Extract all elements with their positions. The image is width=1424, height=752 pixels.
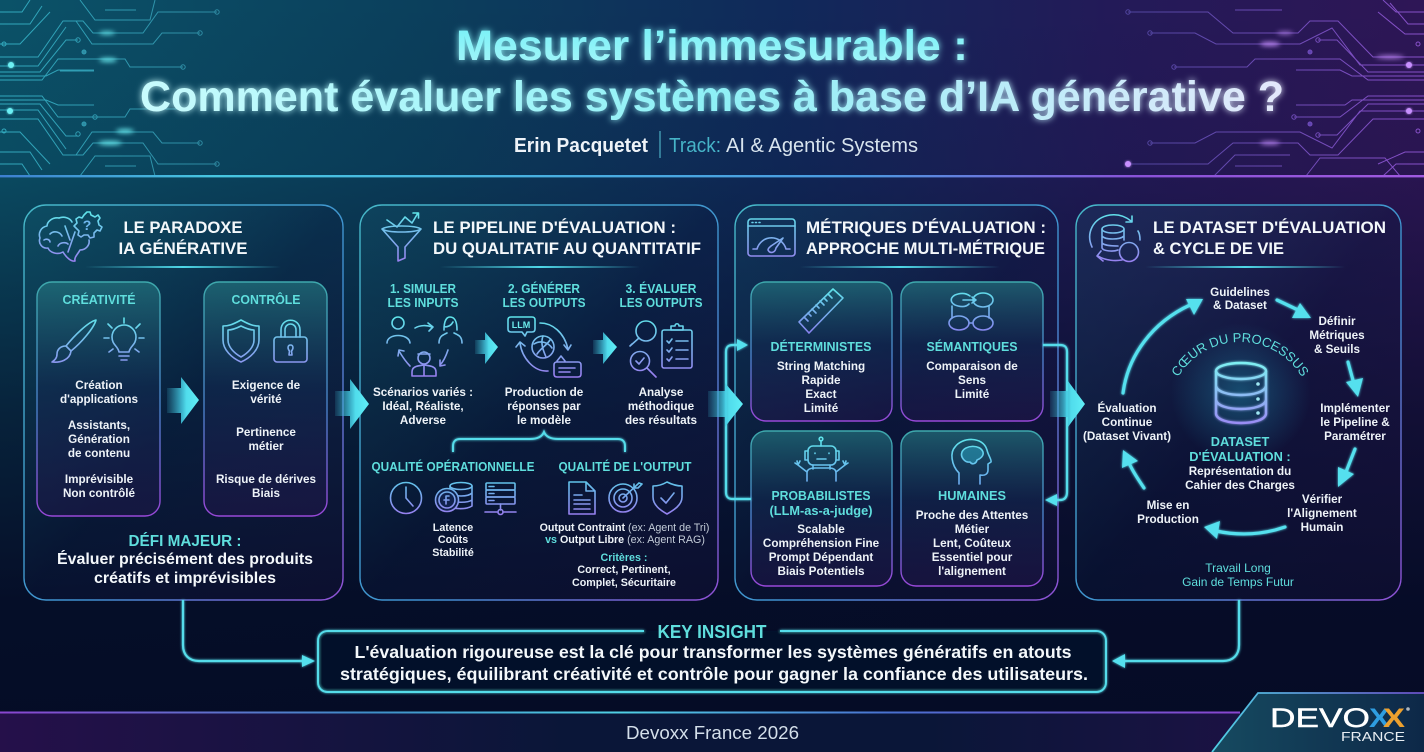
core title: DATASET	[1211, 434, 1269, 449]
card text: Pertinence	[236, 426, 296, 439]
core: cœur du processus	[1172, 333, 1308, 492]
icon: paint brush	[52, 320, 96, 362]
step: évaluation continue: Évaluation	[1097, 402, 1157, 415]
step: définir: Définir	[1318, 315, 1356, 328]
callout: défi majeur	[57, 531, 313, 587]
core title: D'ÉVALUATION :	[1189, 449, 1291, 464]
text: Stabilité	[432, 547, 474, 559]
text: Coûts	[438, 534, 468, 546]
icon: three personas	[387, 317, 462, 376]
icon: dataset cycle	[1090, 215, 1140, 262]
criteria: Correct, Pertinent,	[577, 564, 671, 576]
fat arrow: panel 3 to panel 4	[1050, 381, 1085, 427]
logo xx: X	[1369, 703, 1390, 733]
step 1: simuler les inputs: 1. SIMULER	[390, 282, 456, 296]
criteria: Critères :	[601, 552, 647, 564]
step text: Adverse	[400, 414, 447, 427]
heading: & CYCLE DE VIE	[1153, 239, 1284, 258]
arrow: créativité to contrôle	[167, 377, 199, 424]
card text: Création	[75, 379, 123, 392]
title: Mesurer l’immesurable :	[456, 22, 968, 70]
step text: Production de	[505, 386, 584, 399]
card text: vérité	[250, 393, 282, 406]
icon: padlock	[274, 320, 307, 362]
step text	[505, 386, 584, 427]
icon: head with brain	[952, 439, 991, 484]
connector: probabilistes to déterministes	[726, 339, 751, 499]
step: vérifier: l'Alignement	[1287, 507, 1357, 520]
icon: database	[1216, 363, 1266, 423]
logo wordmark: DEVO	[1270, 703, 1370, 733]
title	[770, 488, 872, 518]
icon: server	[485, 483, 516, 514]
heading: MÉTRIQUES D'ÉVALUATION :	[806, 218, 1046, 237]
note: travail long: Travail Long	[1205, 561, 1271, 575]
step: implémenter	[1320, 402, 1390, 443]
text	[763, 523, 880, 578]
icon: brain with question gear	[39, 212, 102, 261]
note: travail long	[1182, 561, 1294, 589]
icon glyph: question mark: ?	[83, 217, 91, 233]
arrow: step 2 to 3	[593, 332, 617, 364]
heading	[433, 218, 701, 258]
circuit glow points left	[7, 31, 134, 145]
step: vérifier	[1287, 493, 1357, 534]
icon: dashboard window	[748, 219, 795, 256]
step 3: évaluer les outputs	[620, 281, 702, 427]
text: Scalable	[797, 523, 845, 536]
card text: Imprévisible	[65, 473, 134, 486]
step text	[625, 386, 698, 427]
step: implémenter: le Pipeline &	[1320, 416, 1390, 429]
card: créativité	[37, 282, 160, 516]
callout: défi majeur: Évaluer précisément des produits	[57, 549, 313, 568]
card text: Exigence de	[232, 379, 301, 392]
connector: panel 4 to key insight	[1112, 600, 1239, 668]
text: Essentiel pour	[932, 551, 1013, 564]
icon label: LLM: LLM	[512, 320, 530, 330]
step: mise en production	[1137, 499, 1199, 526]
divider	[1145, 266, 1345, 268]
title: SÉMANTIQUES	[926, 339, 1018, 354]
heading: DU QUALITATIF AU QUANTITATIF	[433, 239, 701, 258]
card text: Biais	[252, 487, 280, 500]
text: String Matching	[777, 360, 865, 373]
logo registered dot	[1406, 707, 1410, 711]
output description: vs Output Libre (ex: Agent RAG)	[545, 534, 705, 546]
step text: Scénarios variés :	[373, 386, 473, 399]
step 3: évaluer les outputs: 3. ÉVALUER	[626, 281, 696, 296]
heading: APPROCHE MULTI-MÉTRIQUE	[806, 239, 1045, 258]
key insight text	[340, 642, 1088, 684]
icon: shield	[223, 320, 259, 362]
step text: des résultats	[625, 414, 698, 427]
text: Lent, Coûteux	[933, 537, 1011, 550]
step: définir: & Seuils	[1314, 343, 1361, 356]
step text: le modèle	[517, 414, 571, 427]
panel: métriques d'évaluation	[735, 205, 1058, 600]
subtitle: AI & Agentic Systems	[726, 135, 918, 157]
criteria	[572, 552, 676, 589]
step: guidelines	[1210, 286, 1270, 312]
cycle steps	[1083, 286, 1390, 534]
step: évaluation continue	[1083, 402, 1171, 443]
step 1: simuler les inputs: LES INPUTS	[388, 296, 458, 310]
title: DÉTERMINISTES	[770, 339, 872, 354]
icon: magnifiers and checklist	[630, 321, 692, 377]
card heading: CONTRÔLE	[232, 292, 300, 307]
heading: LE PIPELINE D'ÉVALUATION :	[433, 218, 676, 237]
step: guidelines: Guidelines	[1210, 286, 1270, 299]
fat arrow: panel 2 to panel 3	[708, 383, 743, 427]
note: travail long: Gain de Temps Futur	[1182, 575, 1294, 589]
card: contrôle	[204, 282, 327, 516]
text: Rapide	[802, 374, 841, 387]
callout: défi majeur: DÉFI MAJEUR :	[128, 531, 242, 550]
step: évaluation continue: (Dataset Vivant)	[1083, 430, 1171, 443]
step text	[373, 386, 473, 427]
icon: light bulb	[104, 318, 144, 360]
heading	[1153, 218, 1386, 258]
card: sémantiques	[901, 282, 1043, 421]
key insight title: KEY INSIGHT	[658, 622, 766, 642]
panel: le pipeline d'évaluation	[360, 205, 718, 600]
step text: Analyse	[639, 386, 684, 399]
key insight text: stratégiques, équilibrant créativité et contrôle pour gagner la confiance des utilisateurs.	[340, 664, 1088, 684]
core title	[1189, 434, 1291, 464]
key insight text: L'évaluation rigoureuse est la clé pour transformer les systèmes génératifs en atouts	[354, 642, 1072, 662]
card text: Non contrôlé	[63, 487, 136, 500]
text	[777, 360, 865, 415]
icon: target	[609, 483, 642, 512]
text: Exact	[805, 388, 837, 401]
brace connector	[453, 432, 625, 452]
connector: panel 1 to key insight	[183, 600, 315, 667]
subtitle: Track:	[669, 135, 721, 157]
card text: métier	[248, 440, 284, 453]
text: Proche des Attentes	[916, 509, 1029, 522]
card text: Assistants,	[68, 419, 130, 432]
title: PROBABILISTES	[772, 488, 871, 503]
text: Prompt Dépendant	[769, 551, 873, 564]
logo xx: X	[1383, 703, 1405, 733]
fat arrow: panel 1 to panel 2	[335, 379, 369, 429]
step: mise en production: Mise en	[1147, 499, 1189, 512]
icon: document	[569, 482, 595, 514]
key insight box	[318, 622, 1106, 692]
card: déterministes	[751, 282, 892, 421]
title: HUMAINES	[938, 488, 1006, 503]
card text: Risque de dérives	[216, 473, 317, 486]
icon: semantic graph	[949, 293, 993, 330]
card text: de contenu	[68, 447, 130, 460]
step 3: évaluer les outputs: LES OUTPUTS	[620, 296, 702, 310]
step: implémenter: Paramétrer	[1324, 430, 1386, 443]
step 2: générer les outputs: 2. GÉNÉRER	[508, 281, 580, 296]
step text: Idéal, Réaliste,	[382, 400, 464, 413]
circuit decoration right	[1126, 0, 1424, 176]
card text: Génération	[68, 433, 130, 446]
subtitle: Erin Pacquetet	[514, 135, 648, 157]
connector: sémantiques to humaines	[1043, 345, 1067, 506]
arrow: step 1 to 2	[475, 332, 498, 364]
block: qualité opérationnelle	[372, 459, 534, 559]
title	[140, 22, 1284, 121]
logo: devoxx france	[1212, 693, 1424, 752]
panel: le paradoxe IA générative	[24, 205, 343, 600]
step: implémenter: Implémenter	[1320, 402, 1390, 415]
text: Limité	[804, 402, 839, 415]
output description	[540, 522, 709, 546]
step 2: générer les outputs: LES OUTPUTS	[502, 296, 586, 310]
cycle arrows	[1122, 299, 1363, 539]
core text: Cahier des Charges	[1185, 479, 1295, 492]
step: guidelines: & Dataset	[1213, 299, 1267, 312]
divider	[85, 266, 281, 268]
title: Comment évaluer les systèmes à base d’IA générative ?	[140, 73, 1284, 121]
text: Compréhension Fine	[763, 537, 880, 550]
step text: méthodique	[628, 400, 695, 413]
footer text: Devoxx France 2026	[626, 723, 799, 743]
text: Limité	[955, 388, 990, 401]
card text	[216, 379, 317, 500]
icon: ruler	[799, 289, 843, 333]
logo france: FRANCE	[1341, 729, 1405, 744]
database lights	[1256, 382, 1260, 415]
text: l'alignement	[938, 565, 1006, 578]
text: Sens	[958, 374, 986, 387]
title: (LLM-as-a-judge)	[770, 503, 872, 518]
subtitle	[514, 131, 918, 158]
step: évaluation continue: Continue	[1102, 416, 1153, 429]
circuit glow points right	[1125, 32, 1412, 167]
heading: LE PARADOXE	[124, 218, 242, 237]
curved label: CŒUR DU PROCESSUS	[1172, 333, 1308, 376]
step: vérifier: Vérifier	[1302, 493, 1343, 506]
core text: Représentation du	[1189, 465, 1291, 478]
card text: d'applications	[60, 393, 139, 406]
step 1: simuler les inputs	[373, 282, 473, 427]
text: Métier	[955, 523, 990, 536]
block: qualité opérationnelle: QUALITÉ OPÉRATIONNELLE	[372, 459, 534, 474]
divider	[800, 266, 1000, 268]
circuit decoration left	[0, 0, 219, 176]
icon: LLM loop	[508, 317, 581, 377]
core text	[1185, 465, 1295, 492]
block: qualité de l'output	[540, 459, 709, 589]
text	[432, 522, 474, 559]
icon: funnel	[382, 213, 421, 261]
heading: IA GÉNÉRATIVE	[118, 239, 248, 258]
panel: dataset d'évaluation et cycle de vie	[1075, 204, 1402, 601]
step 2: générer les outputs	[502, 281, 586, 427]
text: Latence	[433, 522, 473, 534]
text: Comparaison de	[926, 360, 1018, 373]
step text: réponses par	[507, 400, 581, 413]
callout: défi majeur: créatifs et imprévisibles	[94, 570, 276, 587]
heading	[806, 218, 1046, 258]
icon: robot	[795, 437, 848, 481]
card: probabilistes	[751, 431, 892, 586]
step: mise en production: Production	[1137, 513, 1199, 526]
heading: LE DATASET D'ÉVALUATION	[1153, 218, 1386, 237]
card heading: CRÉATIVITÉ	[62, 292, 136, 307]
text	[916, 509, 1029, 578]
icon: shield with check	[653, 482, 682, 514]
card text	[60, 379, 139, 500]
block: qualité de l'output: QUALITÉ DE L'OUTPUT	[558, 459, 692, 474]
output description: Output Contraint (ex: Agent de Tri)	[540, 522, 709, 534]
step: définir	[1309, 315, 1365, 356]
criteria: Complet, Sécuritaire	[572, 577, 676, 589]
header rule	[0, 175, 1424, 177]
heading	[118, 218, 248, 258]
step: vérifier: Humain	[1301, 521, 1343, 534]
card: humaines	[901, 431, 1043, 586]
text	[926, 360, 1018, 401]
footer band	[0, 712, 1424, 752]
divider	[440, 266, 640, 268]
step: définir: Métriques	[1309, 329, 1365, 342]
icon: coins	[436, 482, 472, 512]
text: Biais Potentiels	[777, 565, 865, 578]
icon: clock	[390, 482, 422, 514]
logo xx	[1369, 703, 1405, 733]
